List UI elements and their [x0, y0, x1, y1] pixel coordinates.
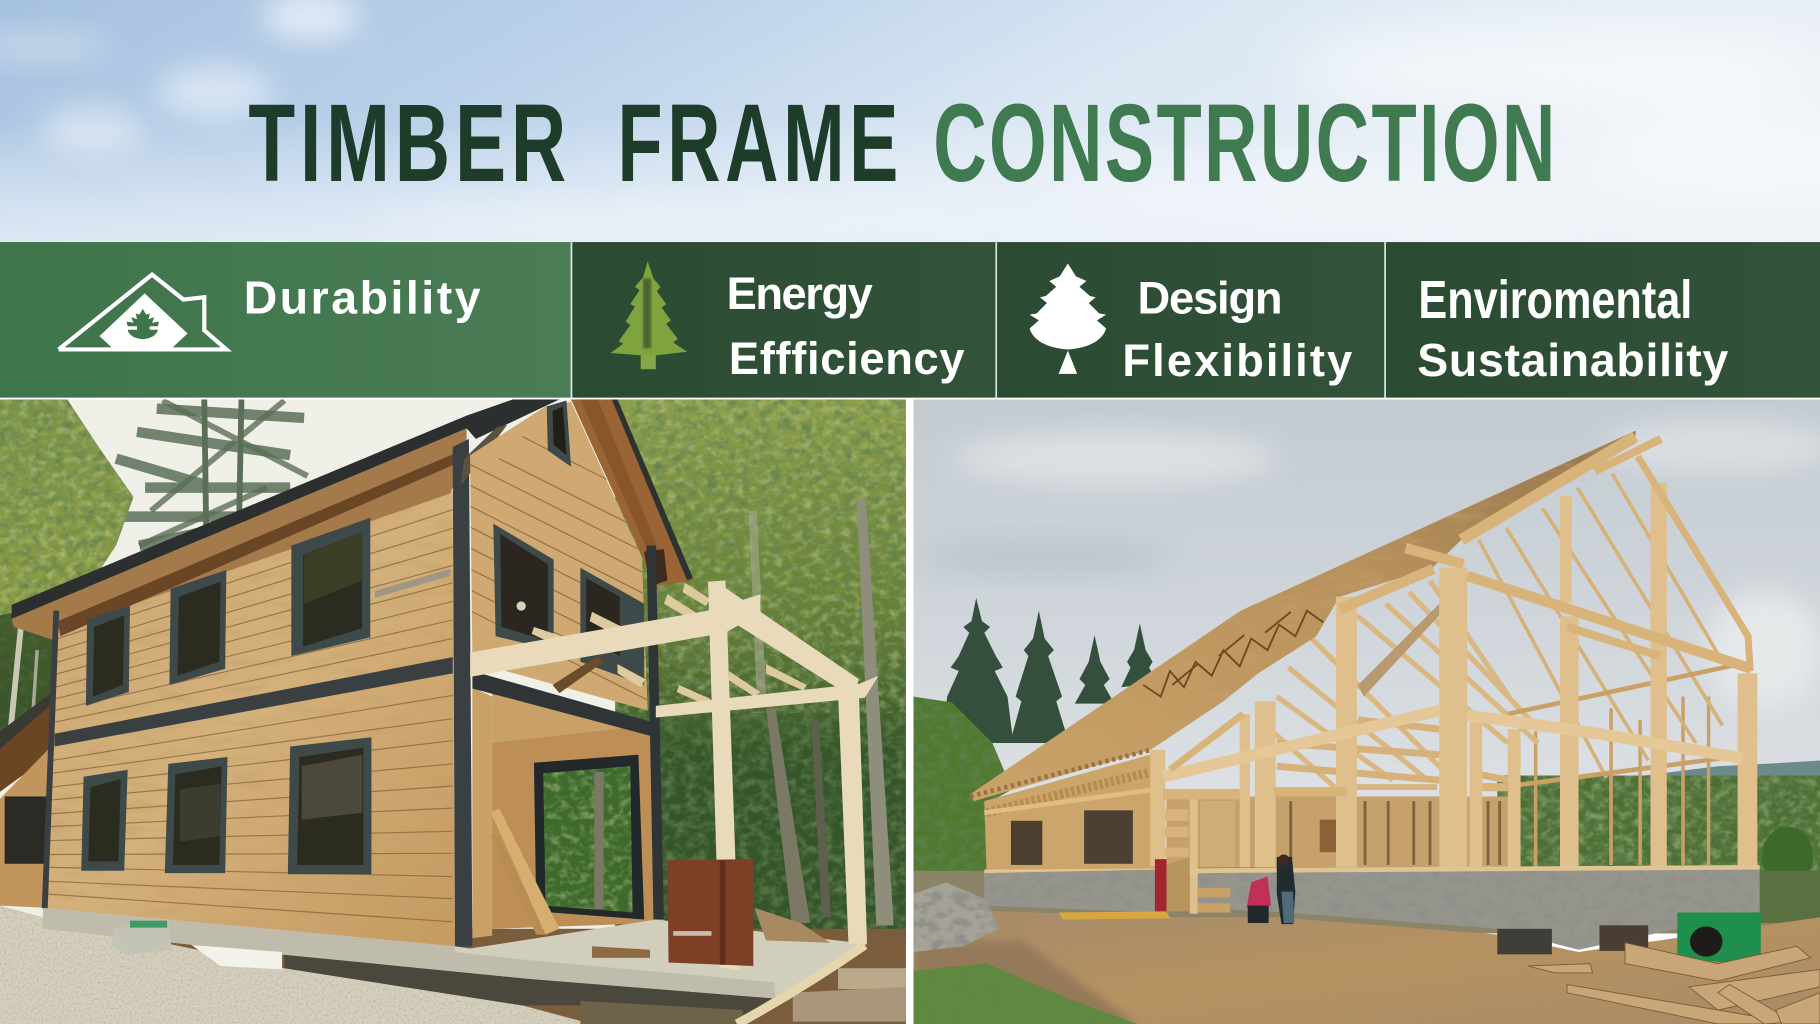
wall trim	[55, 657, 453, 747]
distant hills and trees	[1497, 760, 1820, 923]
panel: energy efficiency	[572, 242, 996, 398]
stair and entry	[1155, 857, 1230, 913]
tall pine behind the roof	[116, 399, 308, 557]
icon: house with leaf	[59, 275, 226, 349]
gable soffit	[571, 399, 693, 586]
timber pergola	[470, 580, 879, 971]
photo: finished timber house	[0, 399, 907, 1024]
sky banner background	[0, 0, 1820, 243]
title	[248, 82, 1558, 205]
icon: green spruce	[611, 261, 687, 369]
thatched roof	[970, 431, 1635, 801]
overcast sky	[913, 399, 1820, 933]
label: environmental sustainability: Sustainability	[1417, 334, 1728, 386]
porch	[472, 546, 664, 938]
label: durability: Durability	[244, 271, 481, 323]
label: energy efficiency	[727, 268, 965, 384]
roof edge	[12, 399, 559, 619]
soffit	[12, 428, 467, 641]
label: design flexibility: Design	[1138, 272, 1283, 323]
red timber box	[667, 859, 753, 966]
interior rafters and far posts	[1167, 474, 1734, 867]
label: design flexibility: Flexibility	[1122, 335, 1352, 386]
label: energy efficiency: Effficiency	[729, 333, 965, 384]
icon: white tree	[1030, 264, 1106, 374]
ground	[913, 882, 1820, 1024]
label: energy efficiency: Energy	[727, 268, 873, 319]
title: timber: TIMBER	[248, 82, 571, 205]
benefits band	[0, 242, 1820, 398]
stone foundation	[984, 870, 1760, 950]
photo: timber frame under construction	[913, 399, 1820, 1024]
label: design flexibility	[1122, 272, 1352, 386]
windows: main wall	[81, 518, 371, 874]
main house wall	[12, 399, 559, 947]
label: environmental sustainability: Enviromental	[1418, 271, 1692, 330]
panel: durability	[0, 242, 571, 398]
spruce trees	[942, 598, 1157, 743]
workers	[1247, 854, 1295, 924]
panel: environmental sustainability	[1386, 242, 1820, 398]
left annex	[0, 693, 51, 908]
forest background	[0, 399, 907, 1024]
gable wall	[470, 399, 693, 711]
ground and slab	[0, 906, 907, 1024]
low wall with windows	[984, 755, 1165, 873]
panel: design flexibility	[997, 242, 1385, 398]
green box and timber pile	[1497, 913, 1820, 1024]
label: environmental sustainability	[1417, 271, 1728, 386]
main timber frame	[984, 437, 1760, 914]
title: frame: FRAME	[618, 82, 903, 205]
leafy bush	[913, 697, 1012, 871]
